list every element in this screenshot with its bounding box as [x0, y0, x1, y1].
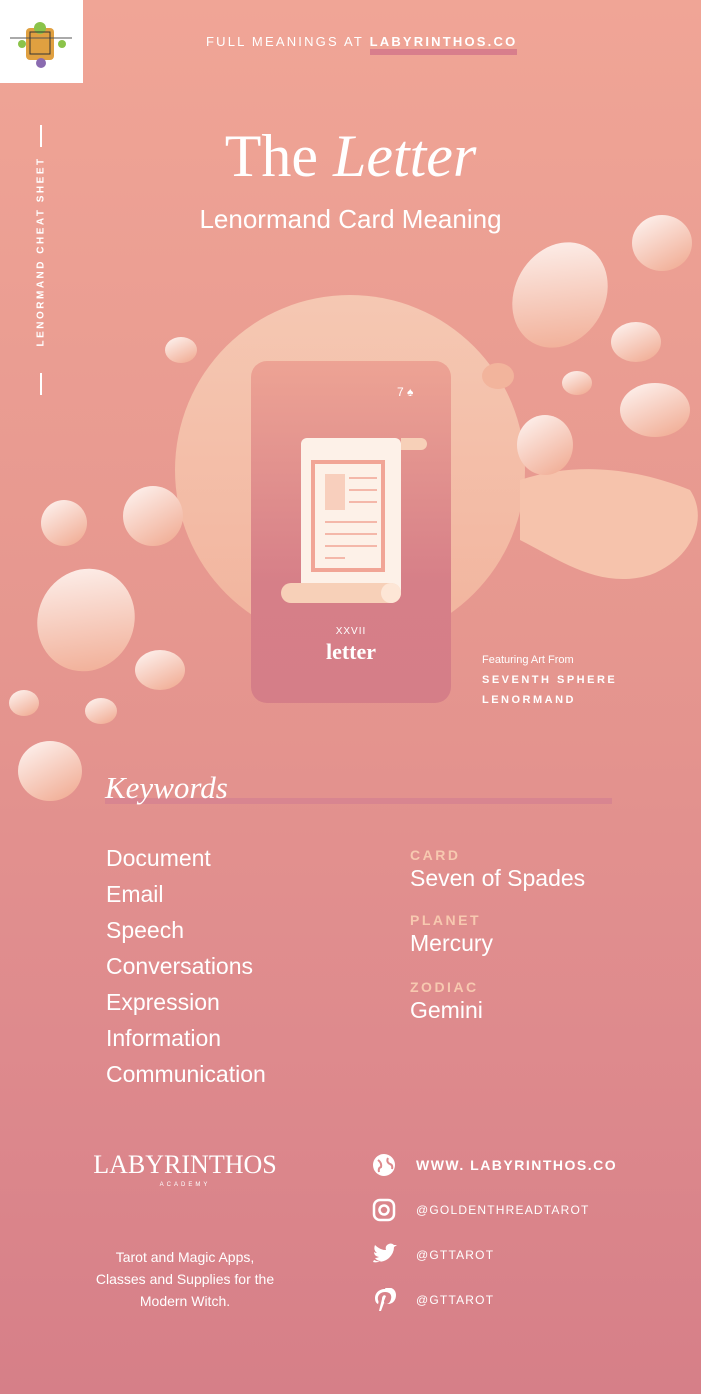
- decorative blobs and circle: [9, 215, 698, 801]
- attributes: Seven of Spades: [410, 865, 585, 891]
- attributes: CARD: [410, 847, 460, 863]
- art credit: Featuring Art From: [482, 654, 574, 666]
- attributes: PLANET: [410, 912, 481, 928]
- keyword list: Email: [106, 881, 164, 907]
- title: The Letter: [225, 123, 476, 189]
- keywords heading: Keywords: [105, 770, 228, 805]
- attributes: Gemini: [410, 997, 483, 1023]
- top link: FULL MEANINGS AT LABYRINTHOS.CO: [206, 34, 517, 49]
- keyword list: Information: [106, 1025, 221, 1051]
- art credit: [482, 654, 617, 706]
- social links: @GTTAROT: [416, 1293, 494, 1307]
- icon: instagram: [372, 1198, 396, 1222]
- keyword list: Expression: [106, 989, 220, 1015]
- social links: WWW. LABYRINTHOS.CO: [416, 1157, 617, 1173]
- keywords heading: [104, 770, 612, 805]
- keyword list: [106, 845, 266, 1087]
- card: [251, 361, 451, 703]
- keyword list: Speech: [106, 917, 184, 943]
- card: letter: [326, 639, 376, 664]
- art credit: SEVENTH SPHERE: [482, 674, 617, 686]
- social links: @GTTAROT: [416, 1248, 494, 1262]
- art credit: LENORMAND: [482, 694, 576, 706]
- icon: pinterest: [375, 1288, 396, 1311]
- card number: 7 ♠: [397, 385, 413, 399]
- keyword list: Communication: [106, 1061, 266, 1087]
- icon: globe: [373, 1154, 395, 1176]
- attributes: Mercury: [410, 930, 493, 956]
- attributes: ZODIAC: [410, 979, 479, 995]
- logo box: [0, 0, 83, 83]
- keyword list: Conversations: [106, 953, 253, 979]
- keyword list: Document: [106, 845, 211, 871]
- icon: twitter: [373, 1244, 397, 1262]
- side label: LENORMAND CHEAT SHEET: [36, 156, 46, 346]
- subtitle: Lenormand Card Meaning: [199, 204, 502, 234]
- tagline: Tarot and Magic Apps, Classes and Supplies for the Modern Witch.: [96, 1249, 274, 1309]
- scroll illustration: [281, 438, 427, 603]
- card name: XXVII: [336, 626, 366, 637]
- social links: @GOLDENTHREADTAROT: [416, 1203, 590, 1217]
- footer brand: ACADEMY: [160, 1182, 210, 1188]
- footer brand: LABYRINTHOS: [93, 1150, 277, 1179]
- social links: [372, 1154, 617, 1311]
- attributes: [410, 847, 585, 1023]
